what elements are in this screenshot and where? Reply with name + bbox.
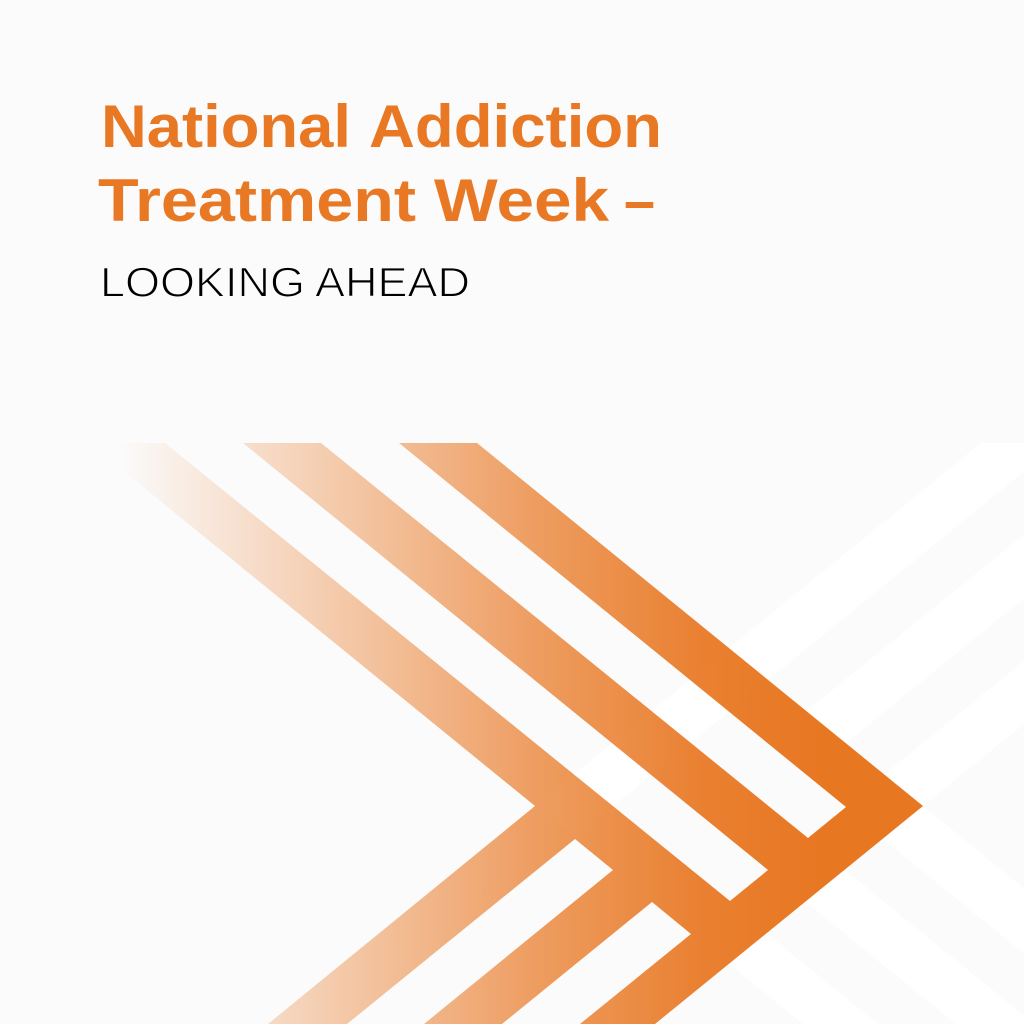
title: Addiction <box>369 93 662 160</box>
title: National <box>101 93 351 160</box>
title: – <box>624 167 655 234</box>
background white mirrored chevron <box>346 443 1024 1024</box>
orange gradient chevron arrow <box>89 443 923 1024</box>
title: Treatment <box>98 167 416 234</box>
title: Week <box>434 167 610 234</box>
subtitle: LOOKING AHEAD <box>100 258 470 306</box>
title <box>98 93 662 234</box>
